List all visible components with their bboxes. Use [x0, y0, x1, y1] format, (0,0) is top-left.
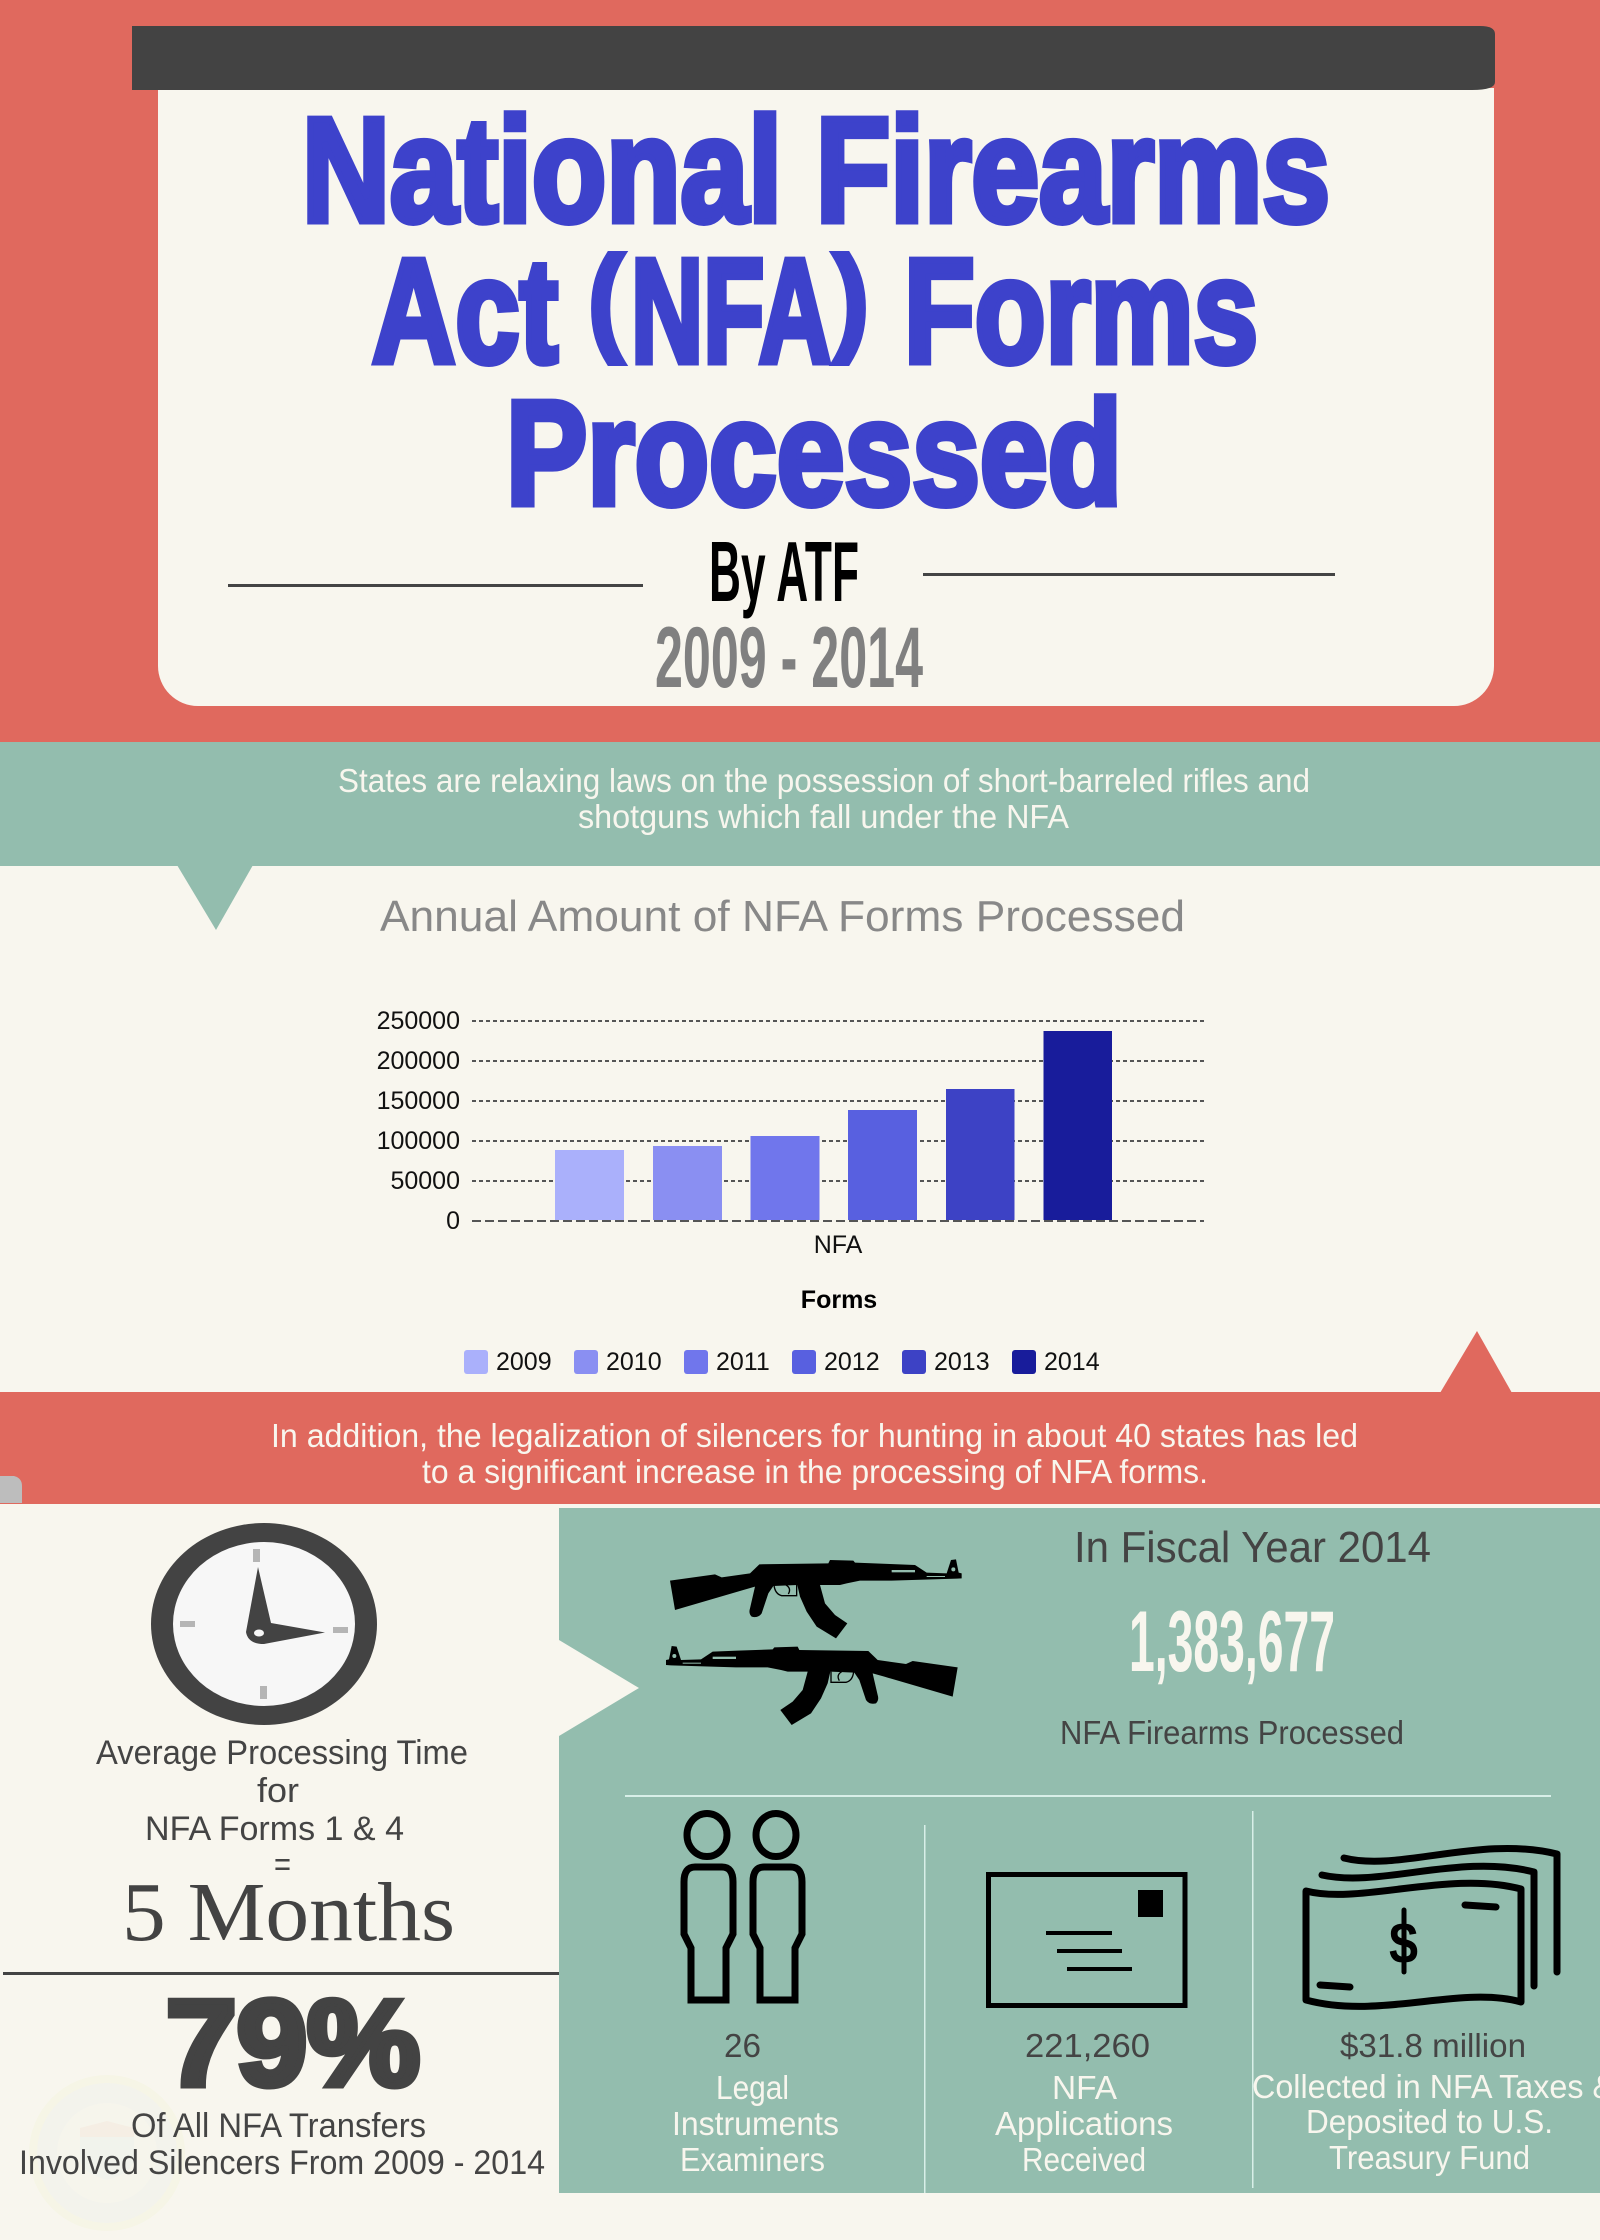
- stat: 79 percent: 79%: [166, 1975, 420, 2111]
- banner text: to a significant increase in the processing of NFA forms.: [422, 1453, 1208, 1490]
- bars: [555, 1031, 1112, 1220]
- banner text: [271, 1417, 1358, 1490]
- icon: upper rifle: [670, 1559, 962, 1638]
- stat block: taxes collected: [1252, 1848, 1600, 2176]
- text: silencer transfers: [19, 2107, 545, 2182]
- stat: 5 months: 5 Months: [122, 1866, 455, 1959]
- banner text: shotguns which fall under the NFA: [578, 798, 1069, 835]
- icon: lower rifle: [666, 1646, 958, 1725]
- y axis labels: 250000: [377, 1007, 460, 1035]
- text: silencer transfers: Involved Silencers From 2009 - 2014: [19, 2144, 545, 2182]
- text: $31.8 million: $31.8 million: [1340, 2027, 1526, 2064]
- title: Forms: [904, 229, 1258, 394]
- title: Act: [372, 229, 558, 394]
- x axis title: Forms: [801, 1286, 877, 1314]
- legend: 2011: [716, 1348, 770, 1376]
- title: National Firearms: [302, 88, 1330, 253]
- legend: 2009: [496, 1348, 552, 1376]
- text: 26 examiners: Examiners: [680, 2141, 825, 2178]
- text: $31.8 million: [1252, 2027, 1600, 2176]
- text: 221,260 applications: [995, 2027, 1173, 2178]
- text: 221,260 applications: 221,260: [1025, 2027, 1150, 2064]
- title: NFA: [631, 229, 831, 394]
- text: silencer transfers: Of All NFA Transfers: [131, 2107, 426, 2145]
- y axis labels: 0: [446, 1207, 460, 1235]
- text: 221,260 applications: Applications: [995, 2105, 1173, 2142]
- title: Processed: [506, 371, 1122, 536]
- legend: 2010: [606, 1348, 662, 1376]
- banner: teal intro: [0, 742, 1600, 930]
- legend: 2014: [1044, 1348, 1100, 1376]
- title: ): [833, 233, 869, 365]
- y axis labels: 200000: [377, 1047, 460, 1075]
- banner: red silencers: [0, 1331, 1600, 1504]
- panel: processing time: [3, 1523, 561, 2182]
- text: $31.8 million: Treasury Fund: [1329, 2139, 1530, 2176]
- y axis labels: 100000: [377, 1127, 460, 1155]
- icon: postcard: [988, 1874, 1185, 2006]
- banner text: [338, 762, 1310, 835]
- x axis category: NFA: [814, 1231, 863, 1259]
- text: 221,260 applications: Received: [1022, 2141, 1146, 2178]
- icon: dollar sign: $: [1389, 1911, 1418, 1976]
- legend: 2012: [824, 1348, 880, 1376]
- title: [302, 88, 1330, 536]
- text: 26 examiners: [672, 2027, 839, 2178]
- banner text: In addition, the legalization of silencers for hunting in about 40 states has led: [271, 1417, 1358, 1454]
- text: average processing time: =: [274, 1846, 291, 1884]
- bar chart: [377, 1007, 1204, 1376]
- y axis labels: 150000: [377, 1087, 460, 1115]
- text: $31.8 million: Deposited to U.S.: [1306, 2103, 1553, 2140]
- stat block: legal instruments examiners: [672, 1814, 839, 2178]
- text: average processing time: Average Processing Time: [96, 1734, 468, 1772]
- text: 26 examiners: Instruments: [672, 2105, 839, 2142]
- text: average processing time: NFA Forms 1 & 4: [145, 1810, 404, 1848]
- y axis labels: 50000: [390, 1167, 460, 1195]
- stat block: applications received: [988, 1874, 1185, 2178]
- panel: header: [0, 0, 1600, 742]
- header card: [158, 88, 1494, 706]
- subtitle: years: 2009 - 2014: [655, 610, 923, 706]
- text: 26 examiners: 26: [724, 2027, 761, 2064]
- icon: banknotes: [1306, 1848, 1557, 2006]
- icon: clock: [151, 1523, 377, 1725]
- stat: firearms processed: 1,383,677: [1129, 1594, 1335, 1690]
- text: 221,260 applications: NFA: [1052, 2069, 1117, 2106]
- legend: 2013: [934, 1348, 990, 1376]
- banner text: States are relaxing laws on the possession of short-barreled rifles and: [338, 762, 1310, 799]
- legend: [464, 1348, 1100, 1376]
- watermark seal: [29, 2075, 185, 2231]
- text: average processing time: [96, 1734, 468, 1884]
- text: average processing time: for: [257, 1772, 299, 1810]
- heading: fiscal year: In Fiscal Year 2014: [1074, 1523, 1431, 1572]
- icon: two people: [684, 1814, 802, 2000]
- y axis labels: [377, 1007, 460, 1235]
- title: (: [588, 233, 625, 365]
- dark header bar: [132, 26, 1495, 90]
- label: firearms processed: NFA Firearms Processed: [1060, 1714, 1404, 1751]
- subtitle: by ATF: By ATF: [709, 525, 859, 620]
- panel: fiscal year 2014: [559, 1508, 1600, 2193]
- chart title: Annual Amount of NFA Forms Processed: [380, 892, 1185, 941]
- text: 26 examiners: Legal: [716, 2069, 789, 2106]
